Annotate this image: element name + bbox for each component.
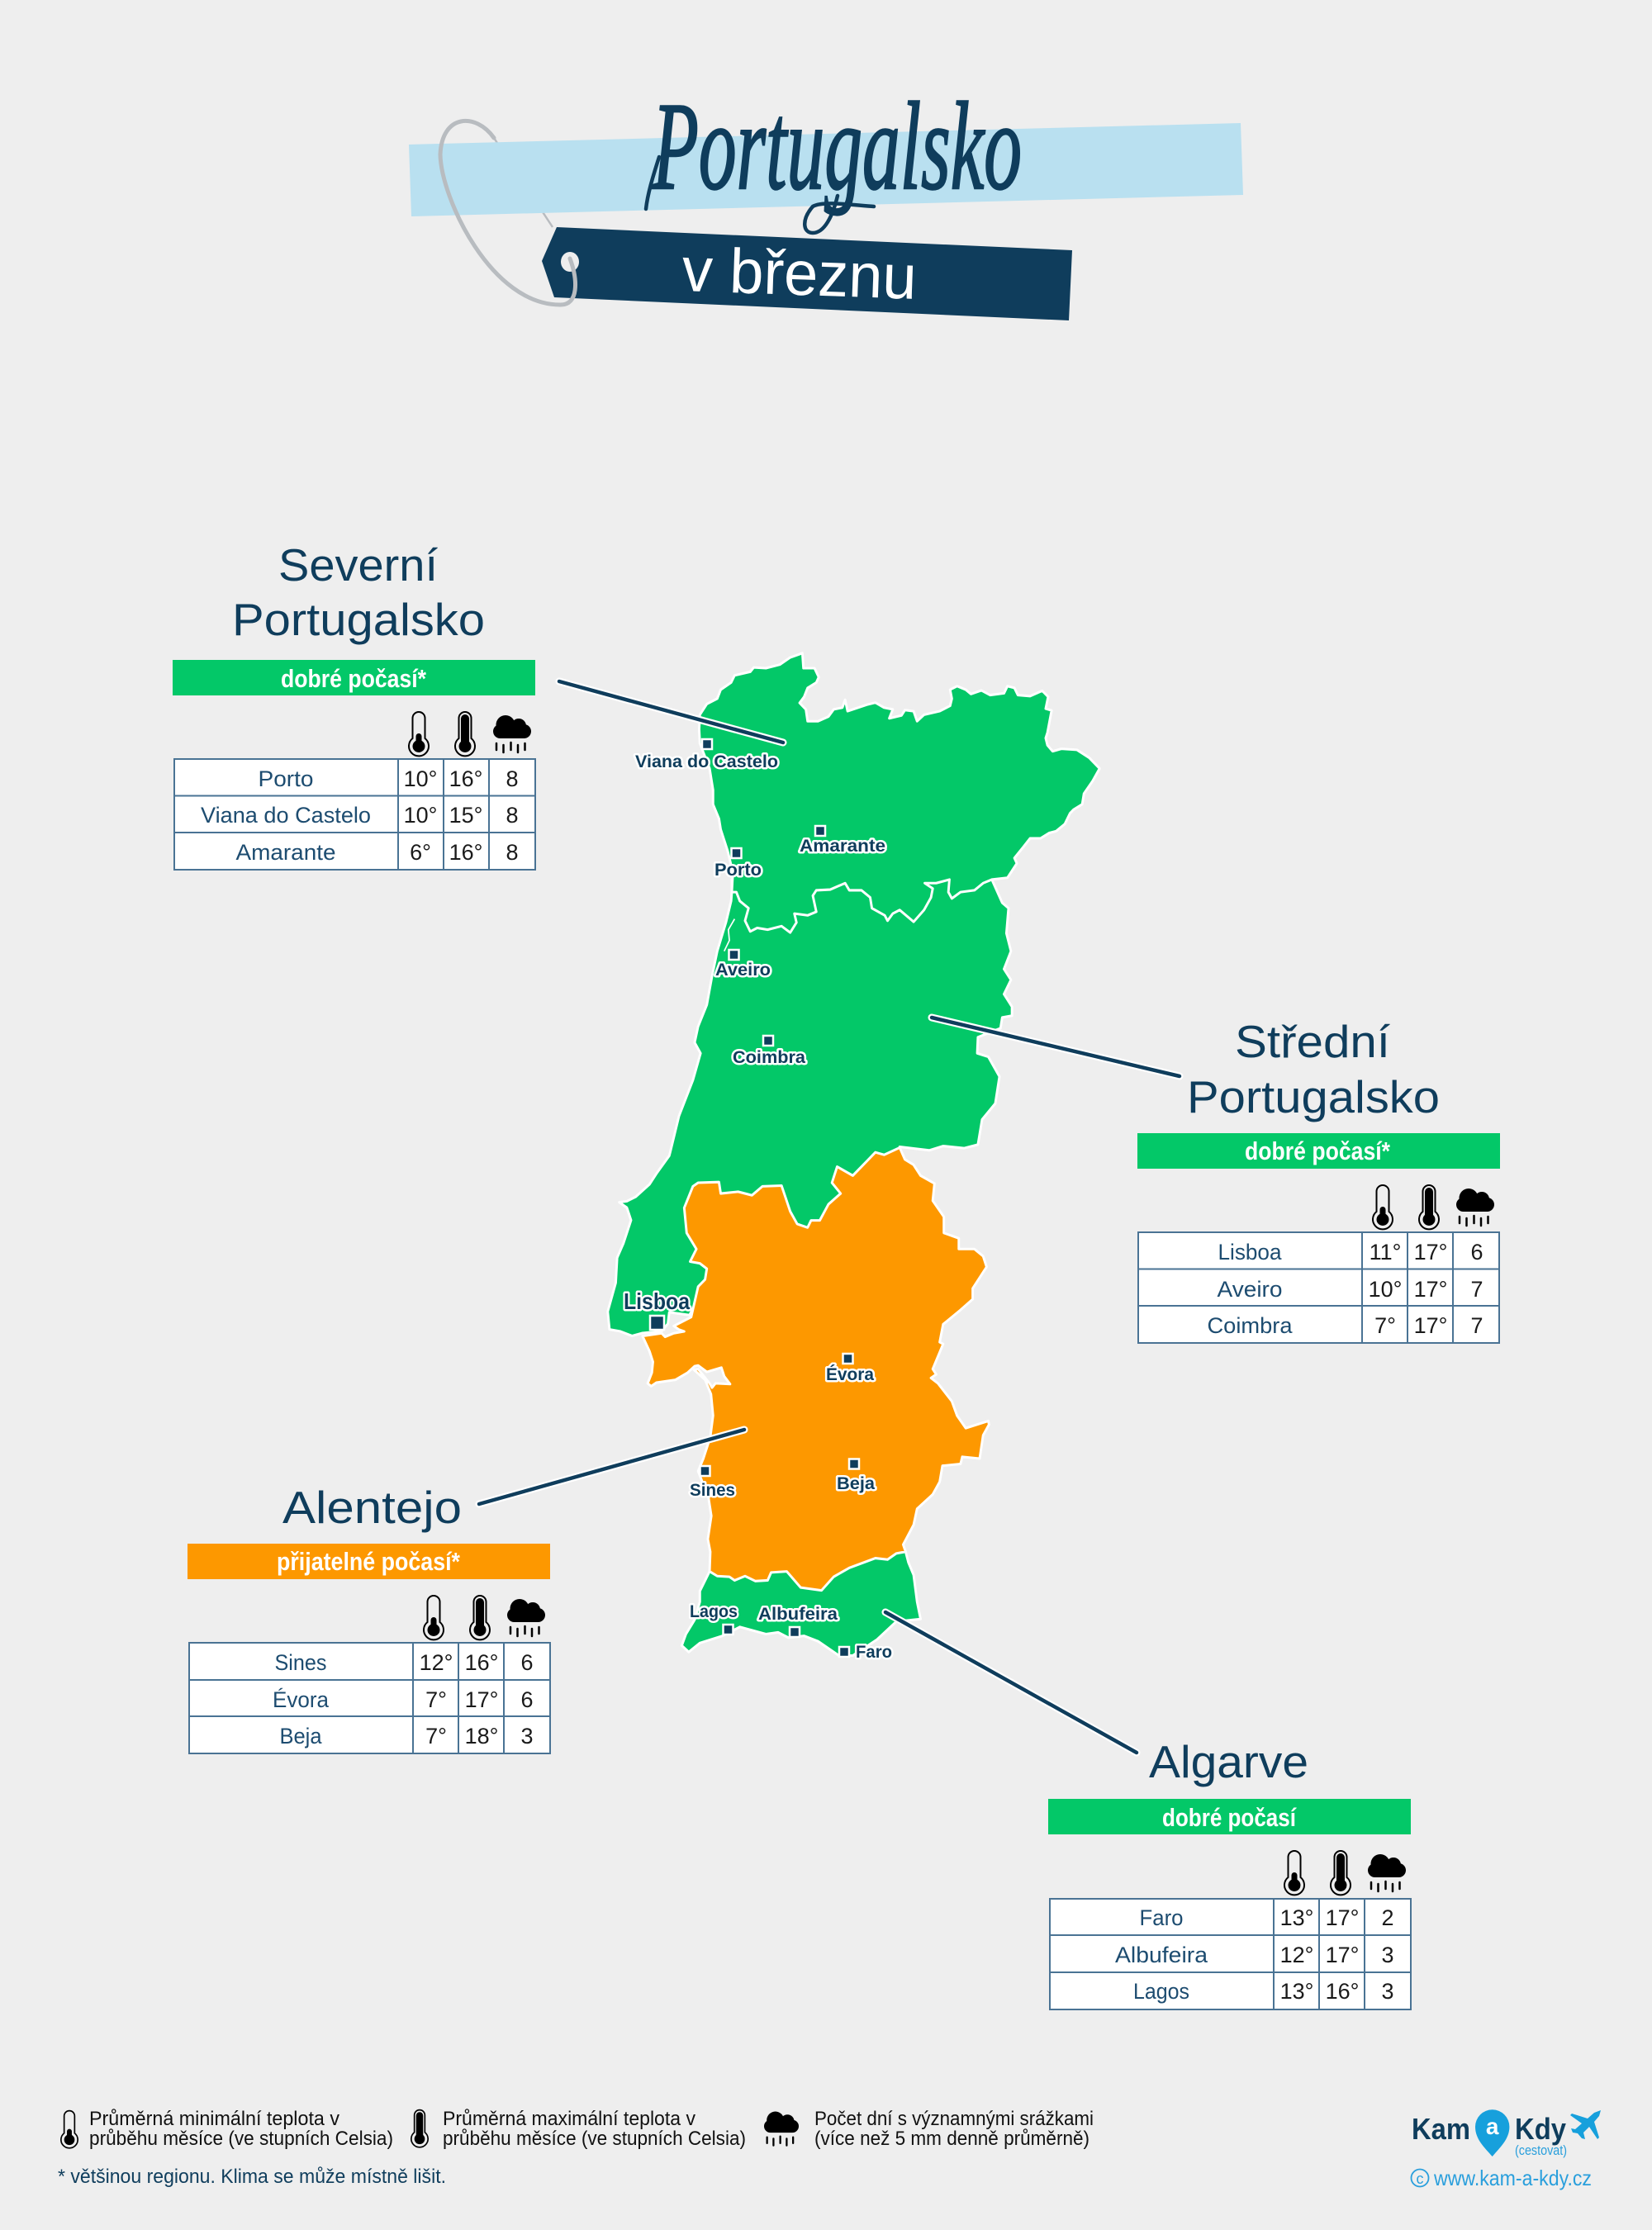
leader line: Algarve — [885, 1612, 1137, 1753]
title block — [409, 77, 1243, 320]
climate table: 17° — [1414, 1277, 1447, 1302]
climate table: 12° — [1280, 1943, 1313, 1967]
panel: Algarve — [1048, 1736, 1411, 2009]
title swash — [646, 157, 874, 233]
climate table: Viana do Castelo — [201, 803, 371, 828]
climate table: 6 — [520, 1687, 534, 1712]
panel: central Portugal — [1137, 1016, 1500, 1343]
column icons — [424, 1596, 545, 1639]
climate table: Lisboa — [1218, 1240, 1282, 1264]
climate table: 11° — [1370, 1240, 1401, 1264]
logo: Kam a Kdy: Kdy — [1515, 2112, 1566, 2146]
climate table: 10° — [404, 803, 437, 828]
title ribbon — [409, 123, 1243, 216]
climate table: 3 — [520, 1724, 534, 1748]
climate table: Aveiro — [1218, 1277, 1282, 1302]
climate table: 6° — [410, 840, 431, 865]
leader line: Alentejo — [479, 1430, 744, 1504]
region: central Portugal — [608, 869, 1012, 1336]
climate table: 16° — [1326, 1979, 1359, 2004]
footnote: * většinou regionu. Klima se může místně lišit. — [58, 2166, 446, 2188]
climate table: 7° — [425, 1687, 447, 1712]
heading: Alentejo — [282, 1482, 462, 1533]
climate table: Coimbra — [1208, 1313, 1293, 1338]
climate table: 7 — [1470, 1313, 1483, 1338]
city markers and labels: Coimbra — [733, 1048, 805, 1067]
heading: Algarve — [1149, 1736, 1308, 1787]
city markers and labels: Lisboa — [624, 1288, 690, 1314]
climate table: 18° — [465, 1724, 498, 1748]
legend: rainy days — [764, 2108, 1094, 2150]
climate table: 17° — [1414, 1313, 1447, 1338]
climate table: 8 — [506, 766, 519, 791]
climate table: 10° — [1369, 1277, 1402, 1302]
rating bar — [1048, 1799, 1411, 1834]
heading — [1187, 1016, 1440, 1122]
subtitle tag: v březnu — [681, 235, 918, 313]
legend: rainy days: (více než 5 mm denně průměrně) — [814, 2128, 1089, 2150]
column icons — [1284, 1851, 1406, 1895]
rating bar: dobré počasí* — [1245, 1136, 1391, 1165]
region: Alentejo — [643, 1148, 989, 1591]
climate table — [174, 759, 535, 870]
column icons — [409, 712, 531, 756]
legend: rainy days: Počet dní s významnými srážkami — [814, 2108, 1094, 2130]
climate table: 17° — [1326, 1905, 1359, 1930]
climate table: Beja — [279, 1724, 322, 1748]
logo: Kam a Kdy — [1412, 2109, 1601, 2158]
climate table: 8 — [506, 803, 519, 828]
subtitle tag — [542, 227, 1072, 320]
climate table: 17° — [1414, 1240, 1447, 1264]
climate table: Sines — [274, 1650, 327, 1675]
legend: minimum temperature: Průměrná minimální teplota v — [89, 2108, 339, 2130]
legend: minimum temperature: průběhu měsíce (ve stupních Celsia) — [89, 2128, 393, 2150]
legend: maximum temperature: průběhu měsíce (ve stupních Celsia) — [443, 2128, 746, 2150]
climate table: 6 — [520, 1650, 534, 1675]
city markers and labels: Aveiro — [715, 961, 771, 980]
heading: Střední — [1235, 1016, 1391, 1067]
title text: Portugalsko — [652, 77, 1022, 216]
legend: maximum temperature — [411, 2108, 746, 2150]
city markers and labels: Porto — [714, 861, 762, 880]
climate table: Lagos — [1133, 1979, 1189, 2004]
logo: Kam a Kdy: (cestovat) — [1515, 2142, 1567, 2158]
logo: Kam a Kdy: Kam — [1412, 2112, 1470, 2146]
climate table: 15° — [449, 803, 482, 828]
rating bar — [188, 1544, 550, 1579]
heading: Severní — [278, 539, 439, 591]
city markers and labels: Albufeira — [758, 1605, 838, 1624]
legend: maximum temperature: Průměrná maximální teplota v — [443, 2108, 695, 2130]
climate table: 7° — [425, 1724, 447, 1748]
climate table: 13° — [1280, 1979, 1313, 2004]
legend — [61, 2108, 1094, 2150]
website: www.kam-a-kdy.cz — [1433, 2166, 1592, 2190]
climate table: 3 — [1381, 1979, 1394, 2004]
city markers and labels: Beja — [837, 1474, 875, 1493]
climate table — [189, 1643, 550, 1753]
icon: map pin: a — [1486, 2114, 1499, 2139]
climate table: 3 — [1381, 1943, 1394, 1967]
leader line: central Portugal — [932, 1018, 1180, 1076]
climate table: 8 — [506, 840, 519, 865]
city markers and labels: Évora — [826, 1365, 874, 1384]
city markers and labels: Lagos — [690, 1602, 738, 1621]
climate table: Amarante — [236, 840, 335, 865]
climate table — [1050, 1899, 1411, 2009]
region: northern Portugal — [699, 653, 1099, 932]
rating bar — [1137, 1133, 1500, 1169]
region: Algarve — [681, 1552, 920, 1656]
climate table: 16° — [449, 766, 482, 791]
climate table — [1138, 1232, 1499, 1343]
website: c — [1416, 2171, 1424, 2187]
climate table: 17° — [465, 1687, 498, 1712]
city markers and labels: Amarante — [800, 837, 885, 856]
climate table: 13° — [1280, 1905, 1313, 1930]
climate table: 16° — [449, 840, 482, 865]
climate table: 7 — [1470, 1277, 1483, 1302]
climate table: 10° — [404, 766, 437, 791]
climate table: Porto — [258, 766, 314, 791]
climate table: Évora — [273, 1687, 330, 1712]
city markers and labels: Sines — [690, 1481, 735, 1500]
climate table: Faro — [1140, 1905, 1183, 1930]
heading: Portugalsko — [1187, 1071, 1440, 1122]
rating bar: přijatelné počasí* — [277, 1547, 461, 1576]
map of Portugal — [608, 653, 1099, 1656]
legend: minimum temperature — [61, 2108, 393, 2150]
climate table: 2 — [1381, 1905, 1394, 1930]
icon: map pin — [1475, 2109, 1509, 2156]
column icons — [1373, 1185, 1494, 1229]
rating bar — [173, 660, 535, 695]
icon: plane — [1570, 2110, 1601, 2139]
city markers and labels: Faro — [856, 1643, 892, 1662]
rating bar: dobré počasí* — [281, 664, 427, 693]
heading — [232, 539, 485, 645]
panel: northern Portugal — [173, 539, 535, 870]
panel: Alentejo — [188, 1482, 550, 1753]
climate table: 17° — [1326, 1943, 1359, 1967]
city markers and labels: Viana do Castelo — [635, 752, 778, 771]
city markers and labels — [624, 739, 892, 1662]
climate table: 16° — [465, 1650, 498, 1675]
tag string — [440, 121, 575, 305]
climate table: Albufeira — [1115, 1943, 1208, 1967]
leader line: northern Portugal — [559, 681, 783, 743]
climate table: 6 — [1470, 1240, 1483, 1264]
climate table: 12° — [420, 1650, 453, 1675]
climate table: 7° — [1374, 1313, 1396, 1338]
heading: Portugalsko — [232, 594, 485, 645]
rating bar: dobré počasí — [1162, 1803, 1297, 1832]
